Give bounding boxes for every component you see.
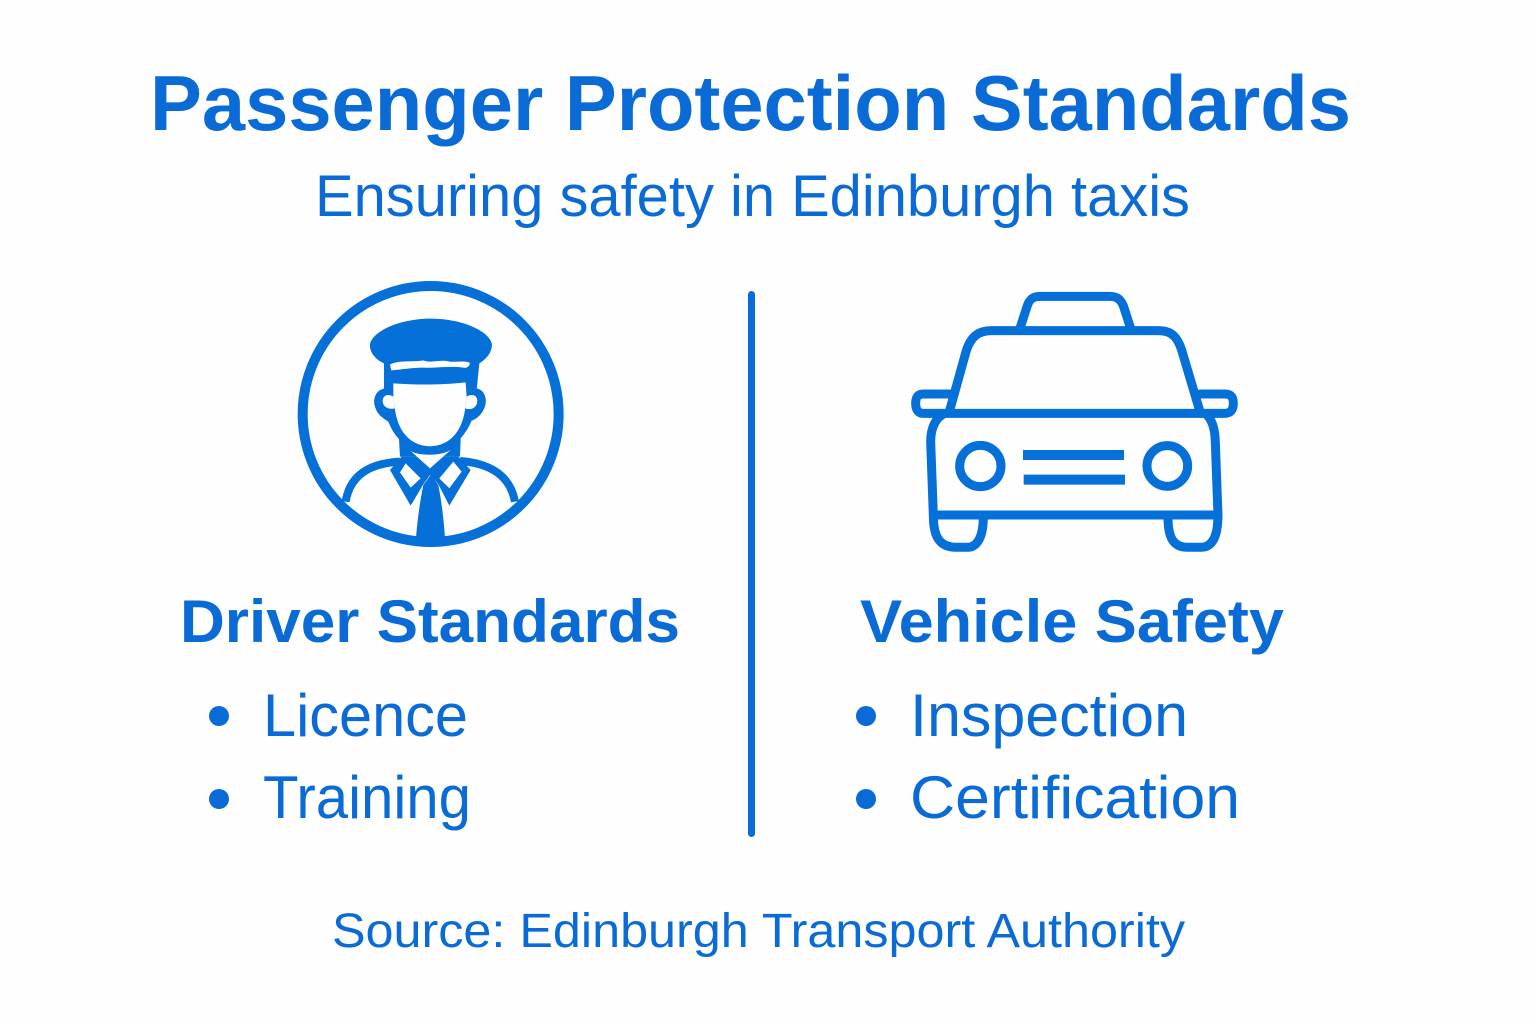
heading: driver standards: Driver Standards (180, 588, 680, 655)
list: vehicle safety (856, 682, 1240, 831)
heading: vehicle safety: Vehicle Safety (860, 588, 1285, 655)
icon: taxi driver in circle (303, 286, 559, 542)
list: vehicle safety: Inspection (910, 682, 1188, 749)
list: driver standards: Licence (263, 682, 468, 749)
list: vehicle safety: Certification (910, 764, 1240, 831)
divider (748, 291, 755, 837)
list: driver standards: Training (263, 764, 471, 831)
subtitle: Ensuring safety in Edinburgh taxis (315, 164, 1190, 229)
list: driver standards (209, 682, 471, 831)
source: Source: Edinburgh Transport Authority (332, 905, 1185, 958)
title: Passenger Protection Standards (150, 59, 1351, 147)
icon: taxi front view (916, 296, 1233, 547)
